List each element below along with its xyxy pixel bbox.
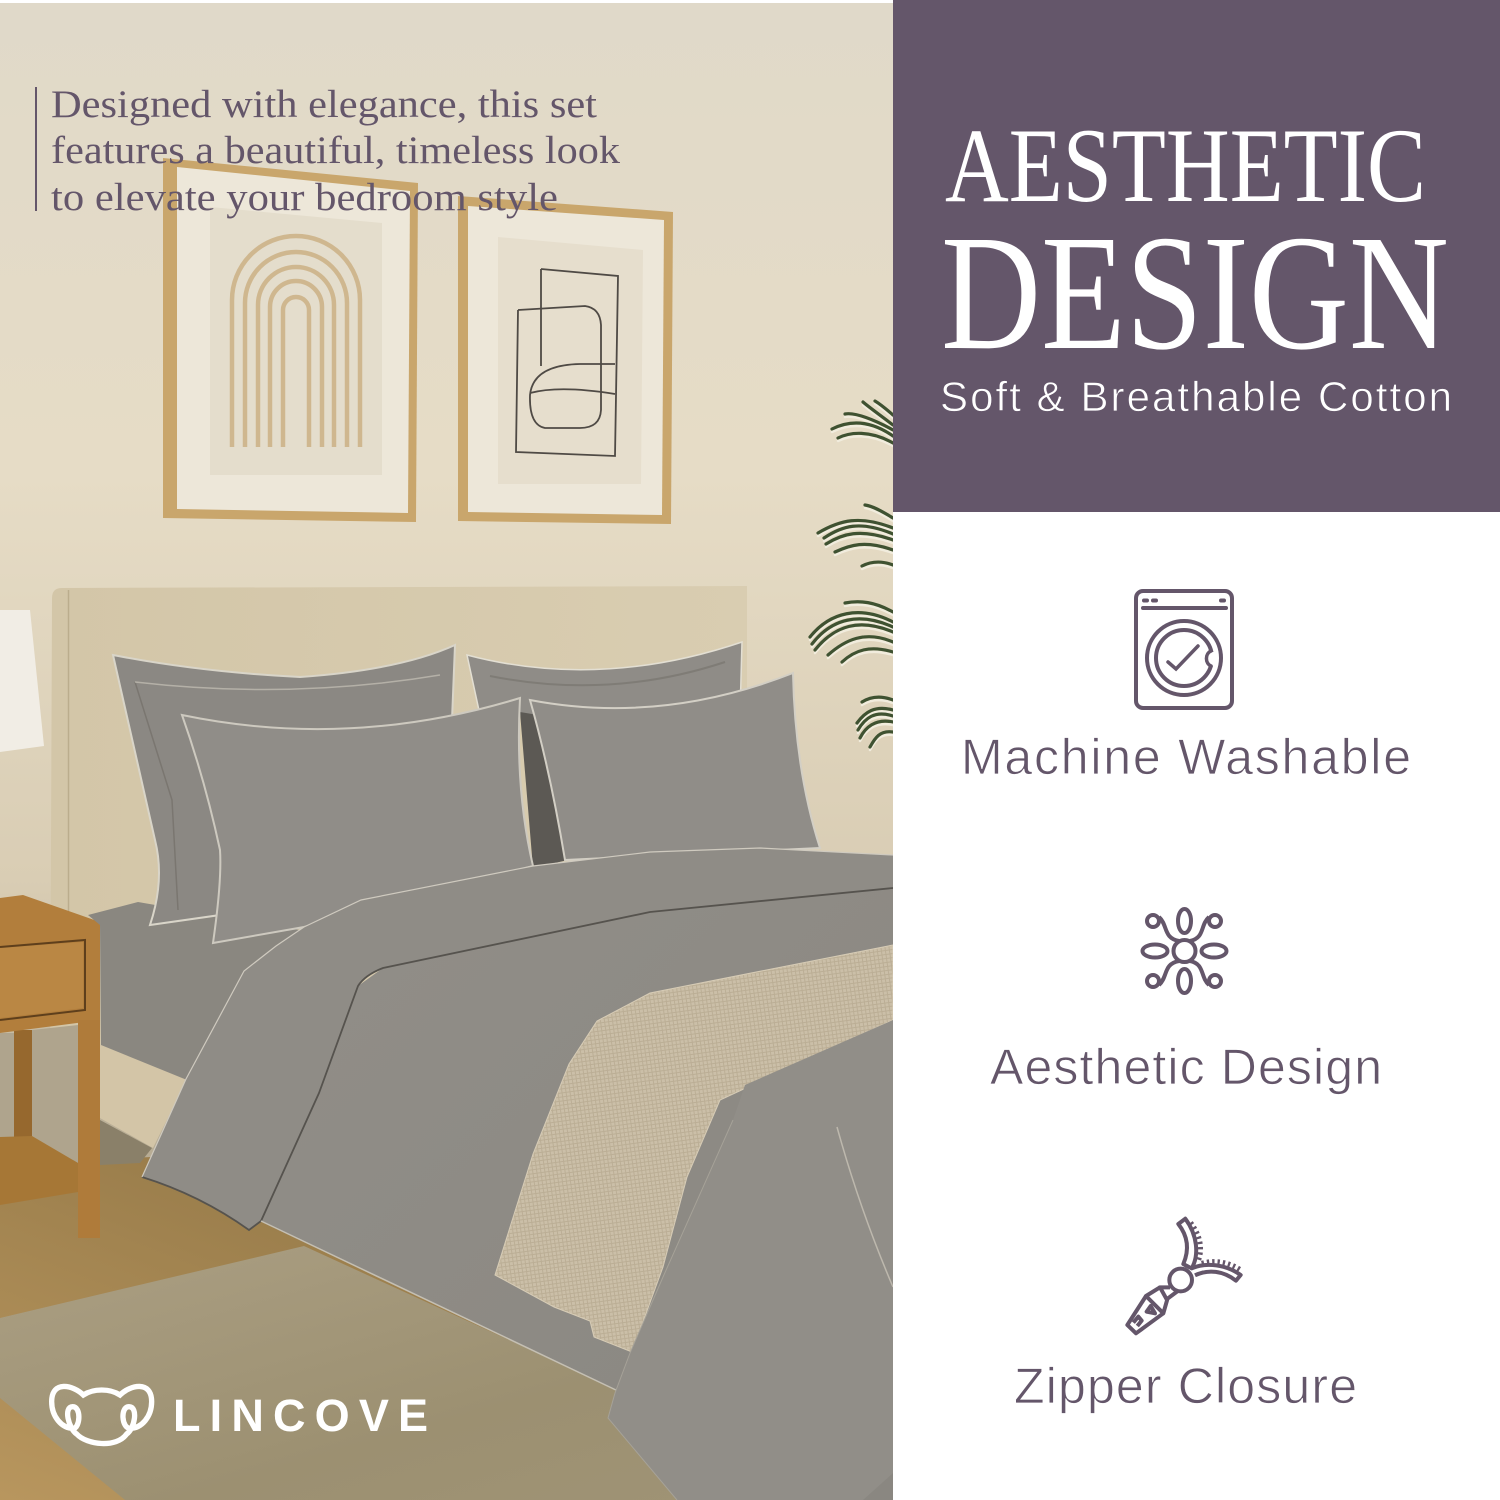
text block: intro: to elevate your bedroom style <box>51 176 558 219</box>
feature: machine washable <box>961 591 1411 785</box>
duvet turned-down band and side flap <box>142 848 893 1230</box>
rug <box>0 1246 676 1500</box>
panel: bedroom photo <box>0 3 893 1500</box>
text block: intro <box>35 83 621 219</box>
panel: heading <box>893 0 1500 512</box>
logo mark <box>52 1386 152 1444</box>
label: Machine Washable <box>961 729 1411 785</box>
headboard <box>50 586 747 1048</box>
logo wordmark: LINCOVE <box>173 1390 428 1441</box>
shadow gap between pillows <box>520 712 568 868</box>
pillow: front left <box>182 698 533 943</box>
feature: zipper closure <box>1014 1219 1357 1414</box>
logo: Lincove <box>52 1386 428 1444</box>
feature: aesthetic design <box>990 909 1382 1095</box>
pillow: back right sham <box>467 642 742 715</box>
pillow: back left sham <box>113 645 455 925</box>
duvet body <box>261 888 893 1500</box>
icon: floral motif <box>1142 909 1226 993</box>
wood floor <box>0 1157 522 1500</box>
bed base <box>100 1076 185 1148</box>
framed art: arches <box>163 158 418 522</box>
duvet <box>142 848 893 1500</box>
label: Zipper Closure <box>1014 1358 1357 1414</box>
icon: washing machine <box>1136 591 1232 708</box>
lamp <box>0 610 44 752</box>
pillow: front right <box>530 673 820 860</box>
framed art: line drawing <box>458 196 673 524</box>
plant <box>810 401 893 750</box>
icon: zipper <box>1127 1219 1242 1333</box>
text block: intro: features a beautiful, timeless look <box>51 129 621 172</box>
text block: intro: Designed with elegance, this set <box>51 83 597 126</box>
subtitle: Soft & Breathable Cotton <box>940 373 1452 420</box>
label: Aesthetic Design <box>990 1039 1382 1095</box>
fitted sheet <box>88 902 300 1080</box>
nightstand <box>0 895 100 1238</box>
duvet bottom edge <box>261 1221 618 1391</box>
wall <box>0 3 893 1173</box>
shadow under bed base <box>100 1120 152 1165</box>
duvet right side flap <box>608 1020 893 1500</box>
throw blanket <box>495 945 893 1352</box>
